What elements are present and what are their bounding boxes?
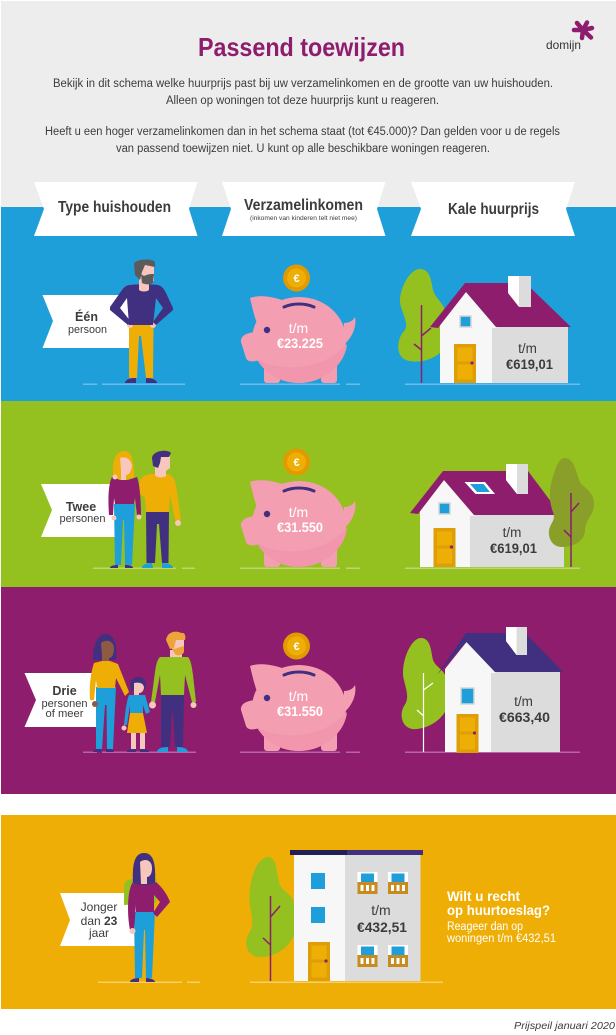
figure: man xyxy=(149,632,196,752)
icon: piggy bank xyxy=(241,296,355,383)
icon: house: €663,40 xyxy=(499,710,550,725)
label: jonger dan 23 jaar: jaar xyxy=(88,926,109,940)
panel: row twee personen xyxy=(41,448,594,569)
icon: piggy bank: t/m xyxy=(289,320,308,336)
icon: house xyxy=(410,464,564,567)
column header: Kale huurprijs: Kale huurprijs xyxy=(448,201,539,218)
icon: piggy bank xyxy=(241,480,355,567)
icon: apartment building: t/m xyxy=(371,902,391,918)
icon: coin: € xyxy=(293,273,300,285)
figure: man xyxy=(138,451,181,568)
icon: coin: € xyxy=(293,641,300,653)
intro text: Heeft u een hoger verzamelinkomen dan in het schema staat (tot €45.000)? Dan gelden voor u de regels xyxy=(45,126,560,138)
figure: man xyxy=(110,260,173,383)
icon: house xyxy=(430,276,571,383)
icon: piggy bank: €31.550 xyxy=(277,703,323,719)
callout: huurtoeslag: Wilt u recht xyxy=(447,888,520,904)
panel: row een persoon xyxy=(42,260,580,385)
figure: student xyxy=(124,853,170,982)
icon: piggy bank xyxy=(241,664,355,751)
label: twee personen: personen xyxy=(60,513,106,525)
intro text: Alleen op woningen tot deze huurprijs kunt u reageren. xyxy=(166,95,439,107)
icon: piggy bank: t/m xyxy=(289,688,308,704)
panel background: green row xyxy=(1,401,616,587)
icon: coin xyxy=(283,264,310,292)
panel: row drie personen xyxy=(24,627,580,753)
callout: huurtoeslag: Reageer dan op xyxy=(447,921,523,933)
column header: Type huishouden: Type huishouden xyxy=(58,199,171,216)
callout: huurtoeslag xyxy=(446,888,556,945)
label: een persoon: Één xyxy=(75,309,98,324)
label: een persoon xyxy=(42,295,132,348)
panel background: orange row xyxy=(1,815,616,1009)
icon: tree xyxy=(549,458,594,567)
icon: house xyxy=(437,627,563,753)
icon: tree xyxy=(402,638,446,752)
intro text: van passend toewijzen niet. U kunt op alle beschikbare woningen reageren. xyxy=(116,143,490,155)
label: drie personen of meer: Drie xyxy=(52,684,77,698)
intro text: Bekijk in dit schema welke huurprijs past bij uw verzamelinkomen en de grootte van uw huishouden. xyxy=(53,78,553,90)
column header: Verzamelinkomen: (inkomen van kinderen telt niet mee) xyxy=(250,216,357,222)
icon: coin xyxy=(283,632,310,660)
icon: piggy bank: €23.225 xyxy=(277,335,323,351)
panel: row jonger dan 23 xyxy=(60,850,556,983)
figure: woman xyxy=(108,451,142,568)
label: drie personen of meer xyxy=(24,673,100,727)
label: twee personen xyxy=(41,484,118,537)
figure: girl xyxy=(122,677,150,752)
icon: house: t/m xyxy=(514,694,533,709)
icon: house: €619,01 xyxy=(490,541,537,556)
label: jonger dan 23 jaar xyxy=(60,893,136,946)
column header: Verzamelinkomen: Verzamelinkomen xyxy=(244,197,363,214)
icon: house: t/m xyxy=(503,525,521,540)
icon: house: €619,01 xyxy=(506,357,553,372)
icon: tree xyxy=(246,857,294,981)
column header: Kale huurprijs xyxy=(411,182,575,236)
title: Passend toewijzen xyxy=(198,32,405,62)
icon: apartment building: €432,51 xyxy=(357,919,407,935)
intro text xyxy=(45,78,560,155)
callout: huurtoeslag: op huurtoeslag? xyxy=(447,902,550,918)
column header: Type huishouden xyxy=(34,182,198,236)
icon: piggy bank: t/m xyxy=(289,504,308,520)
icon: piggy bank: €31.550 xyxy=(277,519,323,535)
label: drie personen of meer: personen xyxy=(42,698,88,710)
label: een persoon: persoon xyxy=(68,324,107,336)
label: jonger dan 23 jaar: dan 23 xyxy=(81,914,118,928)
column header: Verzamelinkomen xyxy=(222,182,386,236)
icon: house: t/m xyxy=(518,341,537,356)
panel background: purple row xyxy=(1,587,616,794)
label: twee personen: Twee xyxy=(66,500,96,514)
background header xyxy=(1,1,616,208)
logo: domijn xyxy=(546,22,592,52)
figure: woman xyxy=(90,634,129,752)
callout: huurtoeslag: woningen t/m €432,51 xyxy=(446,933,556,945)
icon: apartment building xyxy=(290,850,423,981)
panel background: blue row xyxy=(1,207,616,401)
footer note: Prijspeil januari 2020 xyxy=(514,1021,615,1032)
icon: coin: € xyxy=(293,457,300,469)
label: drie personen of meer: of meer xyxy=(46,708,84,720)
logo: domijn: domijn xyxy=(546,38,581,52)
label: jonger dan 23 jaar: Jonger xyxy=(81,900,117,914)
icon: coin xyxy=(283,448,310,476)
icon: tree xyxy=(398,269,446,383)
